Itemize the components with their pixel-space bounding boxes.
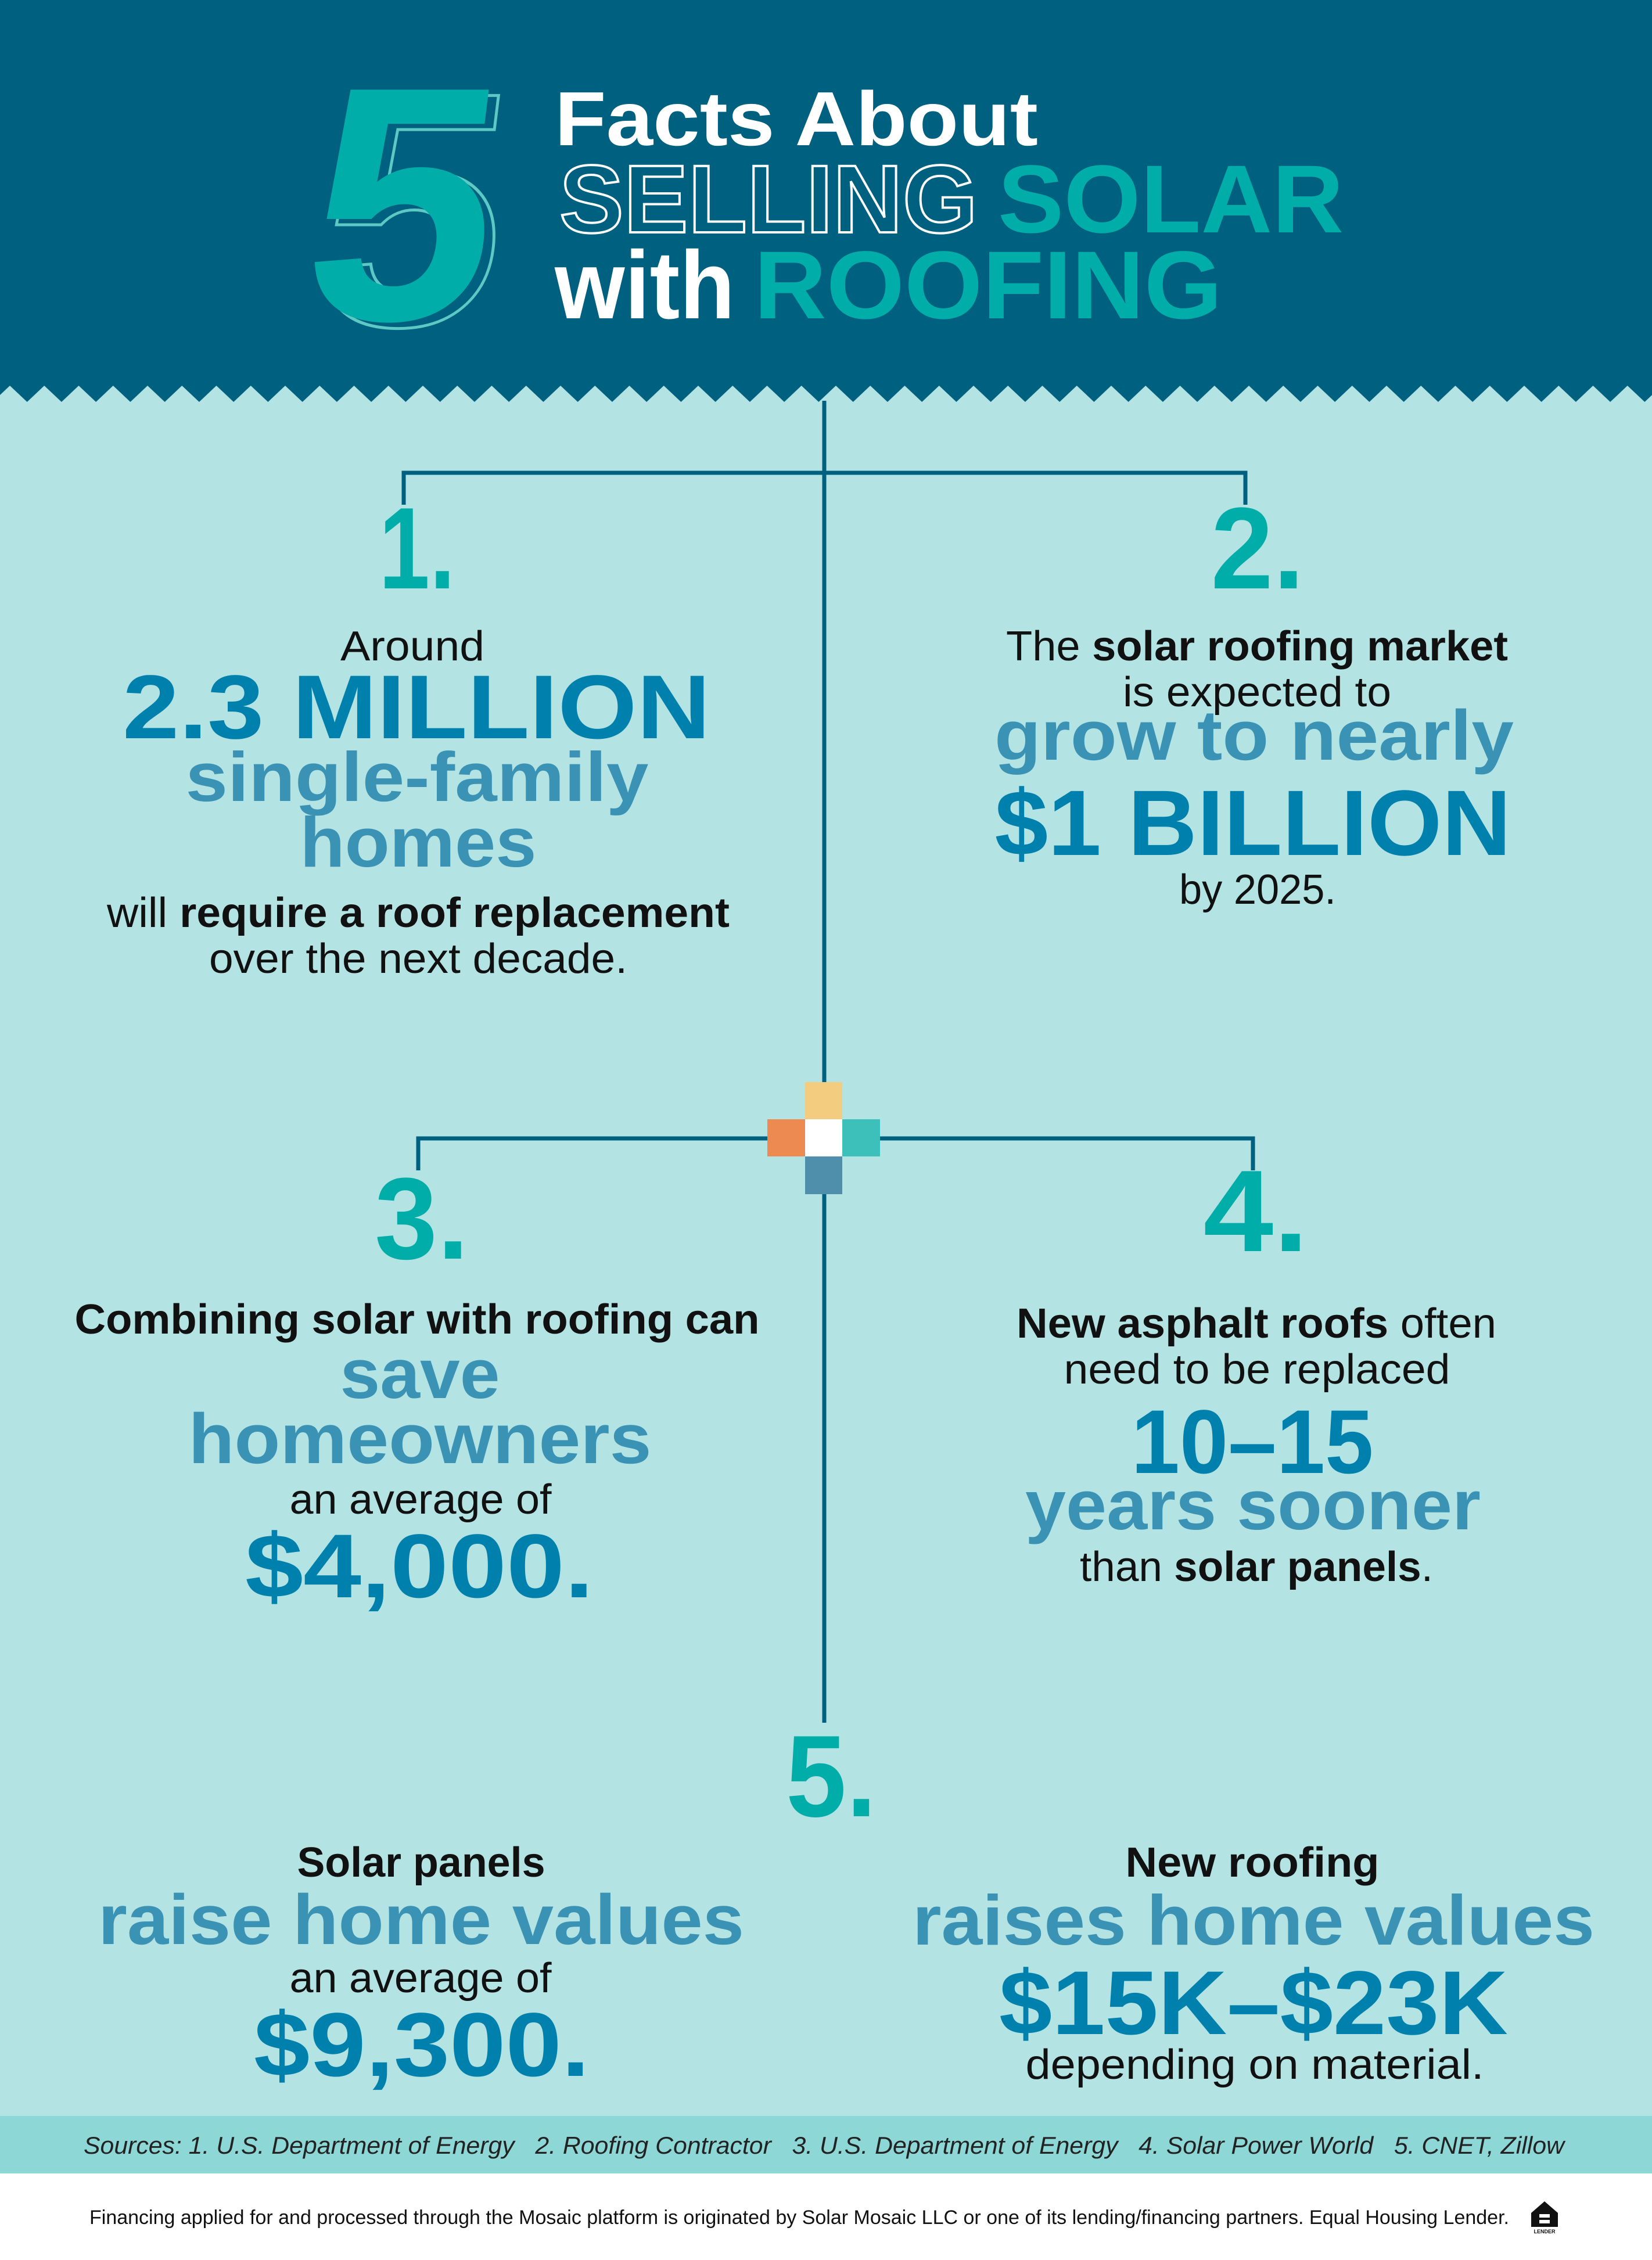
fact 4: 10–15 bbox=[1132, 1392, 1373, 1493]
fact 3: save bbox=[340, 1334, 500, 1413]
fact 3: an average of bbox=[289, 1476, 552, 1523]
fact 2: The solar roofing market bbox=[1006, 623, 1508, 670]
sources band bbox=[0, 2116, 1652, 2173]
fact 2 bbox=[994, 484, 1514, 913]
title: SELLING bbox=[559, 146, 978, 253]
fact 1: homes bbox=[300, 803, 537, 882]
fact 3: $4,000. bbox=[245, 1516, 594, 1617]
fact 4: 4. bbox=[1204, 1147, 1308, 1276]
icon: equal housing lender bbox=[1531, 2201, 1558, 2234]
fact 3 bbox=[74, 1154, 760, 1617]
fact 2: by 2025. bbox=[1179, 867, 1336, 913]
fact 2: is expected to bbox=[1123, 669, 1391, 716]
fact 5 left: solar panels: Solar panels bbox=[297, 1839, 545, 1886]
fact 1: over the next decade. bbox=[209, 936, 627, 982]
fact 1: 1. bbox=[379, 484, 455, 613]
fact 1: single-family bbox=[186, 738, 649, 816]
fact 5 right: new roofing: $15K–$23K bbox=[999, 1953, 1508, 2054]
title: with bbox=[554, 232, 735, 339]
big number 5: 5 bbox=[289, 18, 520, 391]
fact 5 right: new roofing bbox=[913, 1839, 1594, 2088]
footer disclaimer: Financing applied for and processed through the Mosaic platform is originated by Solar Mosaic LLC or one of its lending/financing partners. Equal Housing Lender. bbox=[89, 2207, 1509, 2229]
fact 4: need to be replaced bbox=[1064, 1346, 1450, 1393]
fact 1: 2.3 MILLION bbox=[123, 657, 710, 758]
fact 5 left: solar panels: an average of bbox=[289, 1955, 552, 2002]
fact 2: 2. bbox=[1211, 484, 1305, 613]
fact 5 left: solar panels bbox=[98, 1839, 744, 2096]
fact 1: Around bbox=[340, 623, 484, 670]
fact 1: will require a roof replacement bbox=[106, 890, 730, 936]
header band bbox=[0, 0, 1652, 402]
fact 5 heading: 5. bbox=[786, 1712, 877, 1841]
sources band: Sources: 1. U.S. Department of Energy 2. Roofing Contractor 3. U.S. Department of Energy 4. Solar Power World 5. CNET, Zillow bbox=[84, 2132, 1566, 2159]
title bbox=[554, 76, 1344, 339]
fact 5 right: new roofing: depending on material. bbox=[1026, 2042, 1484, 2088]
fact 5 left: solar panels: raise home values bbox=[98, 1880, 744, 1959]
title: ROOFING bbox=[754, 232, 1222, 339]
fact 4: New asphalt roofs often bbox=[1017, 1300, 1496, 1347]
connector lines bbox=[404, 401, 1253, 1723]
footer disclaimer bbox=[0, 2173, 1652, 2260]
fact 5 left: solar panels: $9,300. bbox=[254, 1995, 590, 2096]
fact 4 bbox=[1017, 1147, 1496, 1590]
icon: equal housing lender: LENDER bbox=[1534, 2229, 1556, 2234]
fact 5 right: new roofing: raises home values bbox=[913, 1881, 1594, 1960]
fact 3: 3. bbox=[375, 1154, 469, 1284]
title: Facts About bbox=[555, 76, 1038, 161]
fact 3: Combining solar with roofing can bbox=[74, 1296, 760, 1343]
fact 5 right: new roofing: New roofing bbox=[1126, 1839, 1379, 1886]
big number 5: 5 bbox=[299, 24, 530, 397]
fact 4: years sooner bbox=[1025, 1465, 1481, 1544]
fact 3: homeowners bbox=[188, 1399, 652, 1478]
fact 4: than solar panels. bbox=[1080, 1544, 1433, 1590]
fact 1 bbox=[106, 484, 730, 982]
fact 2: $1 BILLION bbox=[994, 771, 1511, 875]
icon: colored cross bbox=[767, 1082, 880, 1194]
fact 2: grow to nearly bbox=[994, 696, 1514, 775]
title: SOLAR bbox=[998, 146, 1344, 253]
